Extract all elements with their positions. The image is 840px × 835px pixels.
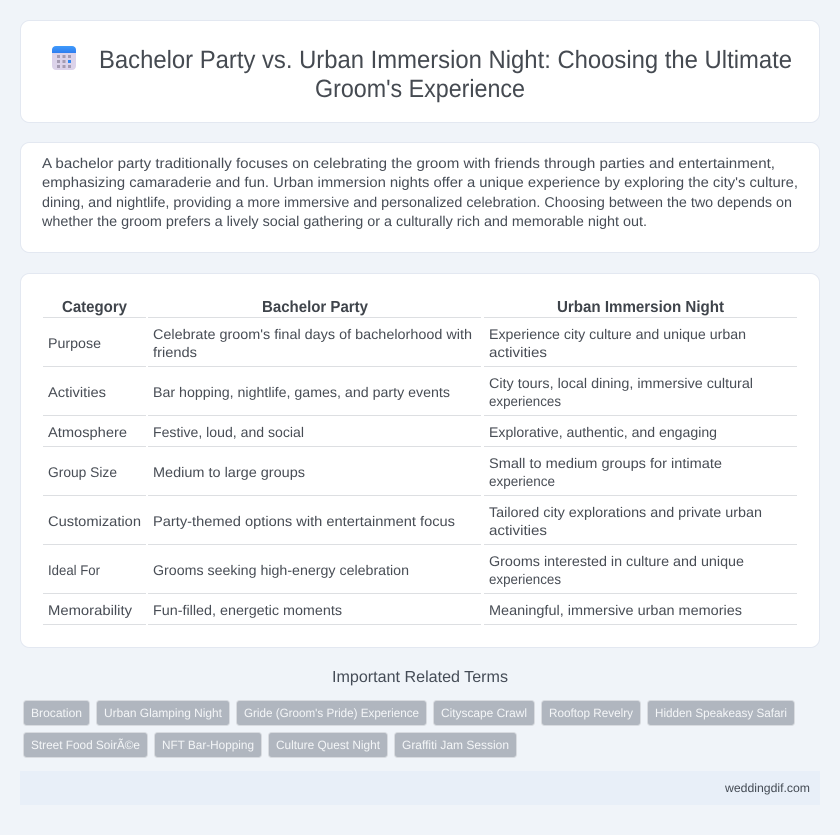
row: purpose: friends [153,344,197,360]
related term tags: Graffiti Jam Session [402,738,509,752]
row: purpose: Celebrate groom's final days of bachelorhood with [153,326,472,342]
panel: introduction [20,142,820,252]
related term tags: Hidden Speakeasy Safari [655,706,787,720]
row: ideal for: Ideal For [48,562,100,578]
row: purpose: activities [489,344,547,360]
table header [62,299,725,316]
row: customization: Party-themed options with entertainment focus [153,513,455,529]
introduction text: emphasizing camaraderie and fun. Urban immersion nights offer a unique experience by exploring the city's culture, [42,175,798,191]
panel: comparison table [20,274,820,648]
row: memorability: Memorability [48,602,132,618]
table header: Bachelor Party [262,299,368,316]
row: ideal for [48,553,744,587]
row: group size: Small to medium groups for intimate [489,455,722,471]
row: memorability: Meaningful, immersive urban memories [489,602,742,618]
related term tags: Street Food SoirÃ©e [31,738,140,752]
title text: Bachelor Party vs. Urban Immersion Night: Choosing the Ultimate [99,46,792,74]
related term tags: Rooftop Revelry [549,706,633,720]
introduction text: dining, and nightlife, providing a more immersive and personalized celebration. Choosing between the two depends on [42,195,792,211]
row: activities: Bar hopping, nightlife, games, and party events [153,384,450,400]
row: group size [48,455,722,489]
related term tags: NFT Bar-Hopping [162,738,254,752]
row: purpose: Purpose [48,335,101,351]
row: activities: experiences [489,393,561,409]
table header: Category [62,299,127,316]
row: atmosphere: Festive, loud, and social [153,424,304,440]
row: group size: Medium to large groups [153,464,305,480]
row: customization: Tailored city explorations and private urban [489,504,762,520]
row: activities: City tours, local dining, immersive cultural [489,375,753,391]
title text: Groom's Experience [315,75,525,103]
related term tags: Gride (Groom's Pride) Experience [244,706,419,720]
related term tags: Culture Quest Night [276,738,381,752]
introduction text: whether the groom prefers a lively social gathering or a culturally rich and memorable night out. [41,214,647,230]
row: ideal for: experiences [489,571,561,587]
row: memorability [48,602,742,618]
row: atmosphere: Explorative, authentic, and engaging [489,424,717,440]
heading: important related terms: Important Related Terms [332,669,508,686]
table header: Urban Immersion Night [557,299,725,316]
related term tags: Brocation [31,706,82,720]
title text [99,46,792,103]
footer [20,771,820,805]
row: memorability: Fun-filled, energetic moments [153,602,342,618]
related term tags: Cityscape Crawl [441,706,527,720]
introduction text [41,156,798,230]
row: ideal for: Grooms interested in culture and unique [489,553,744,569]
row: purpose [48,326,746,360]
row: group size: experience [489,473,555,489]
row: customization: Customization [48,513,141,529]
row: ideal for: Grooms seeking high-energy celebration [153,562,409,578]
row: purpose: Experience city culture and unique urban [489,326,746,342]
row: atmosphere [48,424,717,440]
row: group size: Group Size [48,464,117,480]
related term tags: Urban Glamping Night [104,706,223,720]
footer: weddingdif.com [724,781,810,795]
introduction text: A bachelor party traditionally focuses on celebrating the groom with friends through parties and entertainment, [42,156,775,172]
row: customization [48,504,762,538]
row: atmosphere: Atmosphere [48,424,127,440]
row: customization: activities [489,522,547,538]
panel: title [20,20,820,122]
icon: calendar [52,46,76,70]
row: activities [48,375,753,409]
related term tags [24,700,794,758]
row: activities: Activities [48,384,106,400]
